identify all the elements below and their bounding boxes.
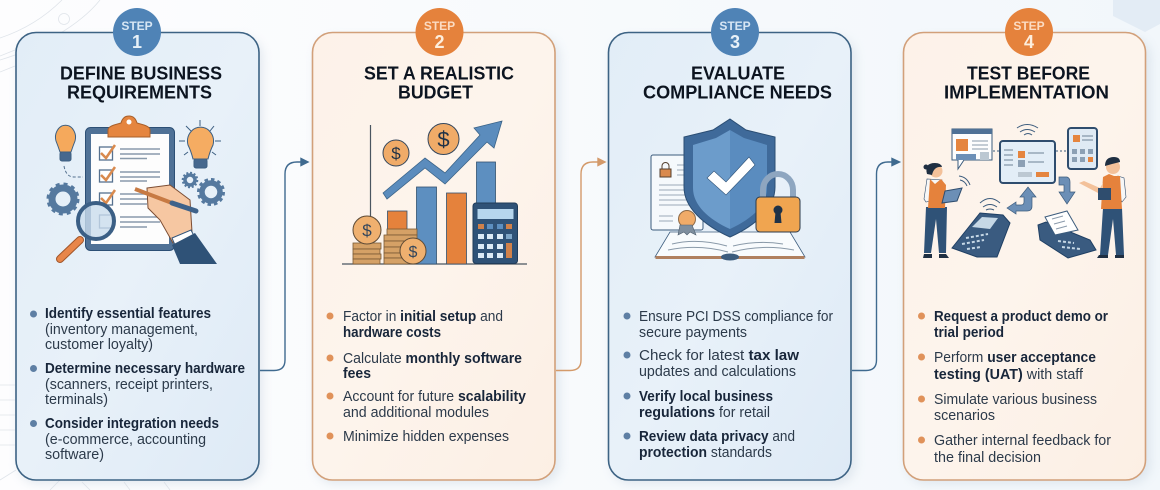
icon: writing hand bbox=[147, 185, 192, 243]
step badge: STEP bbox=[121, 19, 153, 33]
step badge: STEP bbox=[719, 19, 751, 33]
bullet list: regulations for retail bbox=[639, 404, 770, 421]
bullet list: Simulate various business bbox=[934, 391, 1097, 408]
panel: step 1 bbox=[16, 8, 259, 480]
arrow: step 3 to step 4 bbox=[852, 158, 900, 370]
heading: REQUIREMENTS bbox=[67, 82, 212, 102]
heading: COMPLIANCE NEEDS bbox=[643, 82, 832, 102]
step badge bbox=[711, 8, 759, 56]
bullet list bbox=[918, 308, 1111, 466]
card background bbox=[904, 32, 1146, 480]
bullet list: (e-commerce, accounting bbox=[45, 431, 206, 448]
icon: bar chart with coins and calculator: $ bbox=[362, 221, 372, 240]
heading: DEFINE BUSINESS bbox=[60, 64, 222, 84]
bullet list bbox=[326, 308, 527, 445]
bullet list: software) bbox=[45, 446, 104, 463]
panel: step 2 bbox=[312, 8, 555, 480]
step badge bbox=[1005, 8, 1053, 56]
bullet list: protection standards bbox=[639, 444, 772, 461]
card background bbox=[608, 32, 851, 480]
step badge bbox=[416, 8, 464, 56]
bullet list: trial period bbox=[934, 324, 1004, 341]
panel: step 3 bbox=[608, 8, 851, 480]
arrow: step 1 to step 2 bbox=[260, 158, 308, 370]
panel: step 4 bbox=[904, 8, 1146, 480]
terminals bbox=[952, 213, 1010, 257]
bullet list: Gather internal feedback for bbox=[934, 432, 1111, 449]
icon: light bulbs bbox=[56, 120, 221, 168]
icon: POS testing scene bbox=[923, 124, 1126, 258]
step badge: 2 bbox=[434, 32, 445, 52]
bullet list: testing (UAT) with staff bbox=[934, 366, 1084, 383]
bullet list: Ensure PCI DSS compliance for bbox=[639, 308, 833, 325]
icon: bar chart with coins and calculator: $ bbox=[437, 127, 450, 152]
card background bbox=[16, 32, 259, 480]
step badge: 3 bbox=[730, 32, 740, 52]
icon: bar chart with coins and calculator: $ bbox=[391, 144, 401, 163]
bullet list: Perform user acceptance bbox=[934, 349, 1096, 366]
bullet list: (scanners, receipt printers, bbox=[45, 376, 213, 393]
bullet list bbox=[624, 308, 833, 461]
bullet list: updates and calculations bbox=[639, 363, 796, 380]
person right bbox=[1079, 157, 1126, 258]
bullet list: Account for future scalability bbox=[343, 388, 527, 405]
icon: magnifier bbox=[60, 240, 80, 259]
bullet list: Verify local business bbox=[639, 388, 773, 405]
bullet list: customer loyalty) bbox=[45, 336, 153, 353]
heading: EVALUATE bbox=[691, 64, 785, 84]
bullet list: Determine necessary hardware bbox=[45, 360, 245, 377]
person left bbox=[923, 163, 962, 258]
bullet list: Identify essential features bbox=[45, 305, 211, 322]
heading: IMPLEMENTATION bbox=[944, 82, 1109, 102]
bullet list: Review data privacy and bbox=[639, 428, 795, 445]
bullet list: hardware costs bbox=[343, 324, 441, 341]
heading: BUDGET bbox=[398, 82, 473, 102]
bullet list: scenarios bbox=[934, 407, 995, 424]
heading: SET A REALISTIC bbox=[364, 64, 514, 84]
bullet list: Consider integration needs bbox=[45, 415, 219, 432]
bullet list: Request a product demo or bbox=[934, 308, 1108, 325]
bullet list: Factor in initial setup and bbox=[343, 308, 503, 325]
card background bbox=[312, 32, 555, 480]
icon: shield, lock, document and book bbox=[651, 119, 805, 260]
step badge bbox=[113, 8, 161, 56]
icon: gears bbox=[48, 173, 224, 214]
heading bbox=[944, 64, 1109, 102]
bullet list: (inventory management, bbox=[45, 321, 198, 338]
bullet list: terminals) bbox=[45, 391, 108, 408]
icon: bar chart with coins and calculator: $ bbox=[409, 244, 418, 261]
bullet list: secure payments bbox=[639, 324, 747, 341]
bullet list: Calculate monthly software bbox=[343, 350, 522, 367]
bullet list: Minimize hidden expenses bbox=[343, 428, 509, 445]
arrow: step 2 to step 3 bbox=[556, 158, 605, 370]
bullet list: fees bbox=[343, 365, 371, 382]
icon: bar chart with coins and calculator bbox=[342, 121, 527, 264]
heading: TEST BEFORE bbox=[967, 64, 1090, 84]
bullet list bbox=[30, 305, 245, 463]
step badge: STEP bbox=[424, 19, 455, 33]
icon: clipboard with checklist bbox=[48, 116, 224, 264]
step badge: 4 bbox=[1024, 32, 1034, 52]
step badge: 1 bbox=[132, 32, 142, 52]
heading bbox=[60, 64, 222, 102]
bullet list: and additional modules bbox=[343, 404, 489, 421]
bullet list: Check for latest tax law bbox=[639, 347, 799, 364]
bullet list: the final decision bbox=[934, 449, 1041, 466]
step badge: STEP bbox=[1013, 19, 1045, 33]
heading bbox=[364, 64, 514, 102]
arrows bbox=[1059, 177, 1075, 204]
heading bbox=[643, 64, 832, 102]
